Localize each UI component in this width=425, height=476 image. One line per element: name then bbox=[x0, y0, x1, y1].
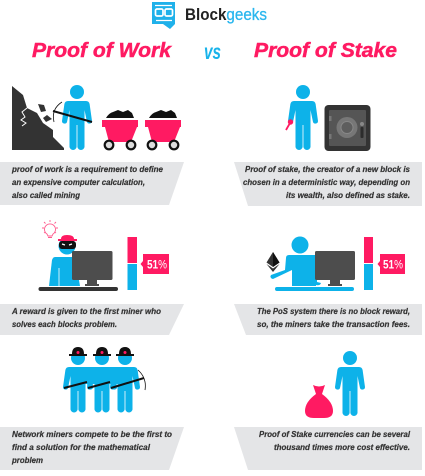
panel: network miners text: Network miners compete to be the first to bbox=[12, 429, 172, 439]
panel: cost effectiveness text bbox=[234, 427, 422, 470]
cart 2 bbox=[145, 110, 181, 149]
panel: proof of stake definition: chosen in a deterministic way, depending on bbox=[243, 177, 410, 187]
illustration: three miners with pickaxes bbox=[63, 347, 145, 413]
panel: proof of stake definition bbox=[234, 162, 422, 206]
heading: vs: vs bbox=[204, 41, 221, 64]
icon: safe bbox=[324, 105, 370, 151]
hooded miner bbox=[49, 235, 80, 286]
panel: network miners text bbox=[0, 427, 184, 470]
panel: network miners text: problem bbox=[11, 455, 43, 465]
icon: ether diamond bbox=[266, 252, 280, 272]
logo bbox=[152, 2, 267, 29]
icon: key bbox=[286, 119, 293, 130]
illustration: person with money bag bbox=[305, 351, 365, 418]
miner 2 bbox=[87, 347, 117, 413]
rock face bbox=[12, 86, 64, 150]
computer monitor bbox=[72, 251, 112, 286]
panel: proof of work definition: an expensive computer calculation, bbox=[12, 177, 145, 187]
heading: Proof of Stake: Proof of Stake bbox=[254, 39, 397, 62]
panel: network miners text: find a solution for the mathematical bbox=[12, 442, 151, 452]
panel: cost effectiveness text: thousand times more cost effective. bbox=[274, 442, 410, 452]
desk bbox=[38, 287, 118, 291]
person bbox=[288, 85, 318, 150]
chart: 51% bar: 51% bbox=[147, 260, 167, 272]
panel: PoS fee text bbox=[234, 304, 422, 335]
icon: light bulb bbox=[42, 220, 58, 238]
icon: money bag bbox=[305, 385, 333, 418]
panel: reward text bbox=[0, 304, 184, 335]
heading: Proof of Work: Proof of Work bbox=[32, 39, 173, 62]
panel: PoS fee text: so, the miners take the transaction fees. bbox=[257, 319, 410, 329]
pickaxes bbox=[64, 370, 145, 390]
panel: reward text: solves each blocks problem. bbox=[12, 319, 117, 329]
panel: PoS fee text: The PoS system there is no block reward, bbox=[257, 306, 410, 316]
panel: proof of work definition bbox=[0, 162, 184, 205]
chart: 51% bar: 51% bbox=[383, 260, 403, 272]
pickaxe bbox=[53, 102, 92, 122]
miner figure bbox=[62, 85, 92, 150]
panel: proof of work definition: proof of work is a requirement to define bbox=[11, 164, 163, 174]
illustration: person with key and safe bbox=[286, 85, 370, 151]
person at desk bbox=[271, 236, 321, 286]
person bbox=[335, 351, 365, 416]
miner 1 bbox=[63, 347, 93, 413]
panel: cost effectiveness text: Proof of Stake currencies can be several bbox=[259, 429, 411, 439]
desk bbox=[275, 287, 354, 291]
illustration: hooded miner at computer with 51% bbox=[38, 220, 169, 291]
panel: reward text: A reward is given to the first miner who bbox=[11, 306, 161, 316]
icon: logo speech bubble bbox=[152, 2, 175, 29]
joined shoulders bbox=[72, 367, 131, 384]
miner 3 bbox=[110, 347, 140, 413]
logo wordmark: Blockgeeks bbox=[185, 5, 267, 24]
illustration: person with ether at computer with 51% bbox=[266, 236, 405, 291]
computer monitor bbox=[315, 251, 355, 286]
panel: proof of stake definition: Proof of stake, the creator of a new block is bbox=[245, 164, 410, 174]
illustration: miner at rock with carts bbox=[12, 85, 181, 150]
panel: proof of work definition: also called mining bbox=[12, 190, 81, 200]
panel: proof of stake definition: its wealth, also defined as stake. bbox=[286, 190, 410, 200]
cart 1 bbox=[102, 110, 138, 149]
